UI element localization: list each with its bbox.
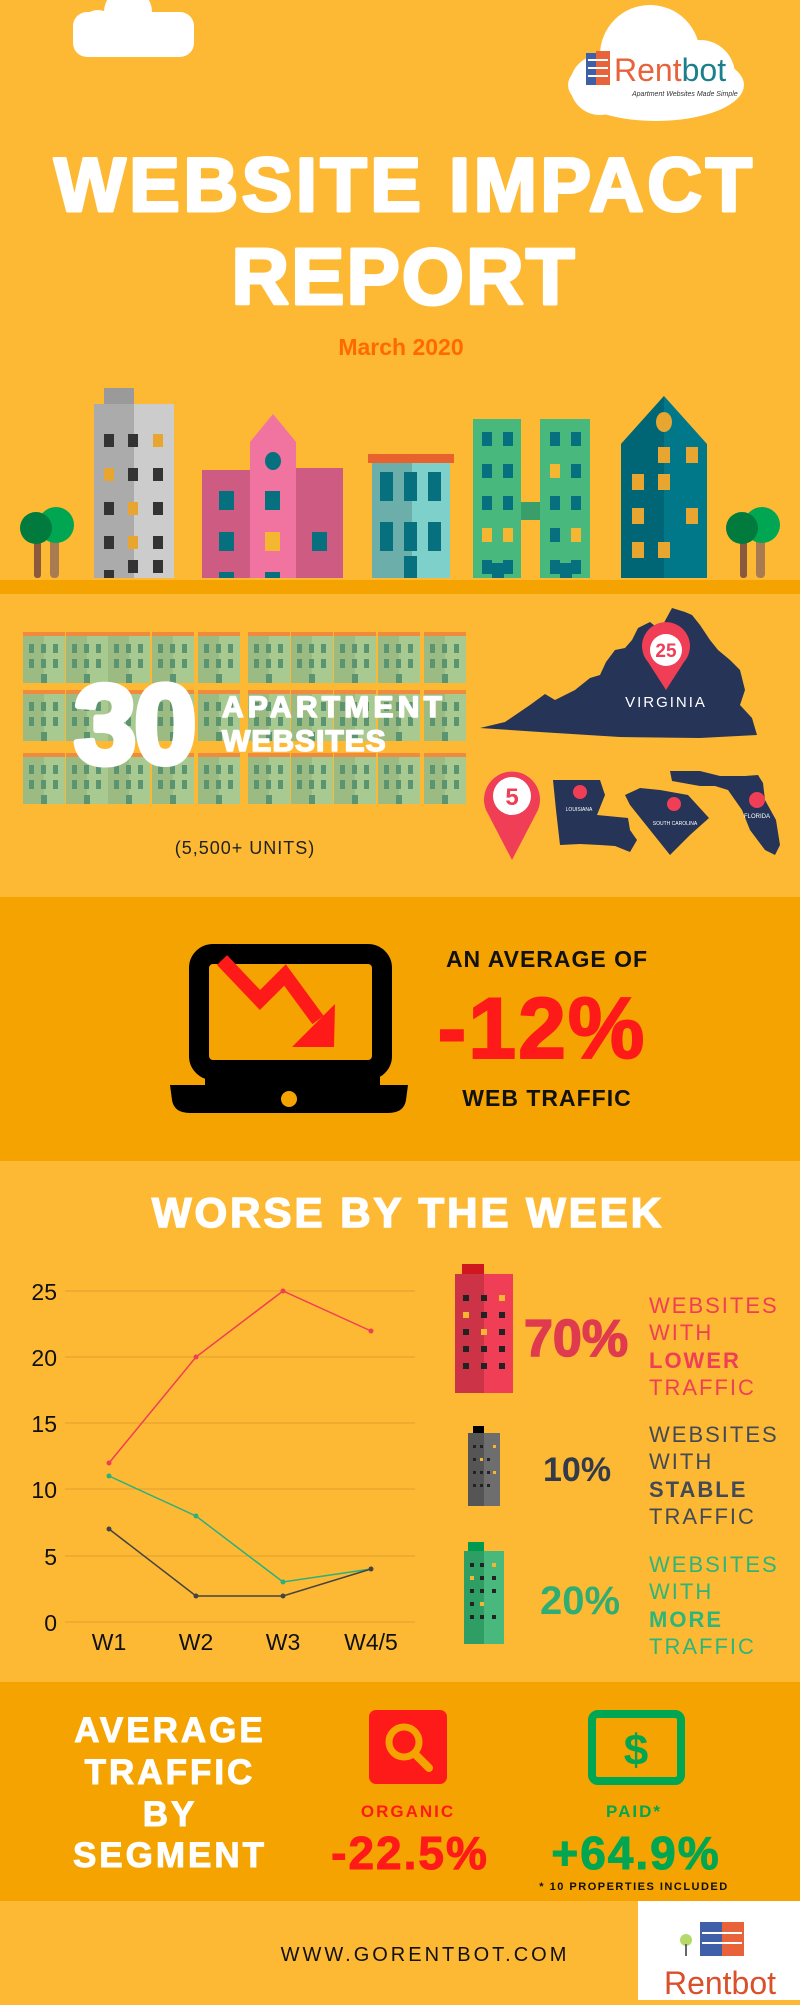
- line chart: W2: [179, 1629, 213, 1655]
- heading: average traffic by segment: AVERAGE: [74, 1711, 266, 1750]
- stat: 70% lower traffic: TRAFFIC: [649, 1375, 756, 1400]
- stat: 10% stable traffic: WEBSITES: [649, 1422, 779, 1447]
- trees right: [726, 507, 780, 578]
- line chart: 10: [31, 1477, 57, 1503]
- stat: 70% lower traffic: [455, 1264, 779, 1400]
- line chart: [31, 1279, 415, 1655]
- skyline buildings: [94, 388, 707, 578]
- stat: 30 apartment websites: [74, 662, 444, 787]
- units note: (5,500+ UNITS): [175, 838, 315, 858]
- map: louisiana: LOUISIANA: [566, 807, 593, 813]
- stat: 30 apartment websites: WEBSITES: [222, 725, 387, 758]
- stat: 70% lower traffic: 70%: [524, 1310, 628, 1368]
- stat: 20% more traffic: TRAFFIC: [649, 1634, 756, 1659]
- line chart: 5: [44, 1544, 57, 1570]
- stat: paid +64.9%: [539, 1802, 729, 1893]
- map: virginia: 25: [655, 641, 677, 662]
- icon: organic search: [369, 1710, 447, 1784]
- heading: worse by the week: WORSE BY THE WEEK: [152, 1189, 664, 1236]
- stat: organic -22.5%: ORGANIC: [361, 1802, 455, 1821]
- stat: 70% lower traffic: WITH: [649, 1320, 713, 1345]
- heading: average traffic by segment: TRAFFIC: [85, 1753, 255, 1792]
- heading: average traffic by segment: [73, 1711, 267, 1875]
- trees left: [20, 507, 74, 578]
- icon: paid dollar: [592, 1714, 681, 1781]
- pin: 5 other states: 5: [505, 784, 519, 811]
- stat: 30 apartment websites: 30: [74, 662, 195, 787]
- footer website url: WWW.GORENTBOT.COM: [281, 1944, 569, 1966]
- cloud left: [73, 0, 194, 57]
- stat: 10% stable traffic: WITH: [649, 1449, 713, 1474]
- pin: 5 other states: [484, 772, 540, 860]
- heading: average traffic by segment: SEGMENT: [73, 1836, 267, 1875]
- logo cloud: [568, 5, 744, 121]
- stat: paid +64.9%: PAID*: [606, 1802, 662, 1821]
- stat: 70% lower traffic: WEBSITES: [649, 1293, 779, 1318]
- footer logo: Rentbot: [664, 1965, 776, 2000]
- stat: -12% web traffic: AN AVERAGE OF: [446, 946, 648, 972]
- stat: 20% more traffic: WITH: [649, 1579, 713, 1604]
- stat: paid +64.9%: * 10 PROPERTIES INCLUDED: [539, 1881, 729, 1893]
- heading: average traffic by segment: BY: [143, 1795, 197, 1834]
- map: florida: FLORIDA: [744, 814, 770, 820]
- stat: 10% stable traffic: TRAFFIC: [649, 1504, 756, 1529]
- title: REPORT: [231, 232, 577, 321]
- map: virginia: [480, 608, 757, 738]
- map: virginia: VIRGINIA: [625, 694, 707, 711]
- line chart: 25: [31, 1279, 57, 1305]
- line chart: 0: [44, 1610, 57, 1636]
- map: south carolina: SOUTH CAROLINA: [653, 821, 698, 827]
- stat: 10% stable traffic: [468, 1422, 779, 1529]
- stat: organic -22.5%: -22.5%: [331, 1827, 489, 1879]
- icon: paid dollar: $: [624, 1726, 648, 1775]
- line chart: 20: [31, 1345, 57, 1371]
- line chart: 15: [31, 1411, 57, 1437]
- line chart: W4/5: [344, 1629, 398, 1655]
- map: louisiana: [553, 780, 637, 852]
- footer logo: [638, 1901, 800, 2001]
- apartment grid: [23, 632, 466, 804]
- line chart: W1: [92, 1629, 126, 1655]
- line chart: W3: [266, 1629, 300, 1655]
- stat: 20% more traffic: 20%: [540, 1579, 620, 1623]
- stat: -12% web traffic: -12%: [438, 981, 646, 1077]
- stat: 10% stable traffic: STABLE: [649, 1477, 747, 1502]
- stat: 20% more traffic: [464, 1542, 779, 1659]
- stat: 20% more traffic: WEBSITES: [649, 1552, 779, 1577]
- stat: paid +64.9%: +64.9%: [551, 1827, 721, 1879]
- stat: 70% lower traffic: LOWER: [649, 1348, 741, 1373]
- title: [54, 143, 754, 321]
- stat: -12% web traffic: WEB TRAFFIC: [462, 1085, 632, 1111]
- background bands: [0, 580, 800, 594]
- map: south carolina: [625, 788, 709, 855]
- stat: 10% stable traffic: 10%: [543, 1451, 611, 1489]
- icon: laptop with falling arrow: [170, 954, 408, 1113]
- title: WEBSITE IMPACT: [54, 143, 754, 228]
- stat: 20% more traffic: MORE: [649, 1607, 723, 1632]
- stat: organic -22.5%: [331, 1802, 489, 1879]
- stat: -12% web traffic: [438, 946, 648, 1111]
- stat: 30 apartment websites: APARTMENT: [222, 691, 444, 724]
- logo cloud: Apartment Websites Made Simple: [631, 91, 738, 98]
- logo cloud: Rentbot: [614, 52, 726, 88]
- subtitle date: March 2020: [338, 334, 464, 360]
- map: florida: [670, 771, 780, 855]
